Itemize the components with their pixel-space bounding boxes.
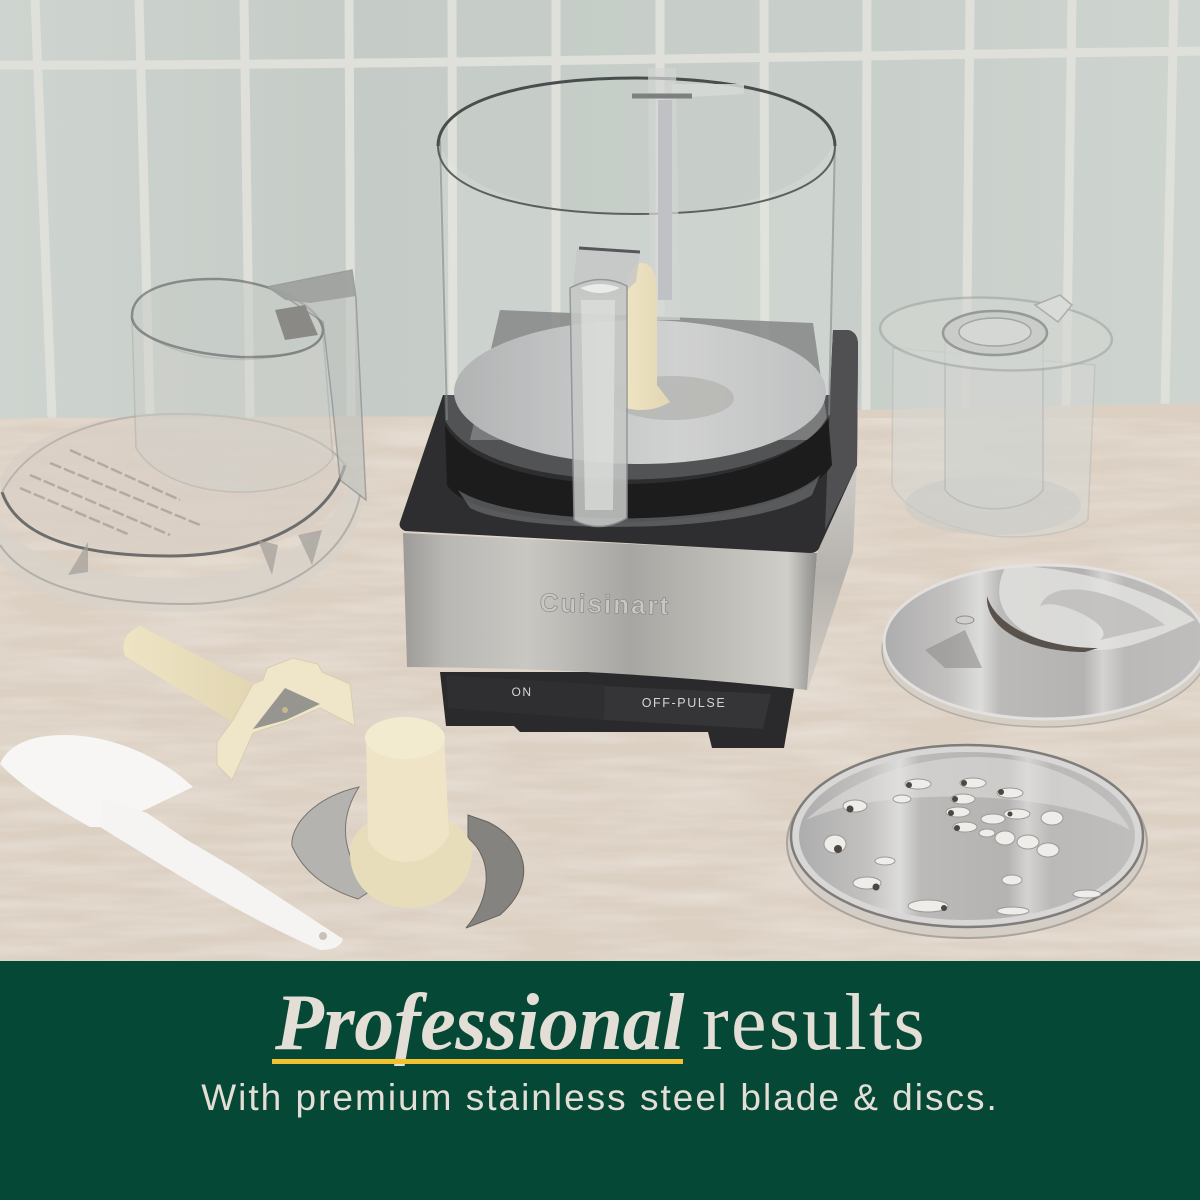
central column	[632, 68, 744, 320]
control buttons	[446, 675, 771, 729]
wall tiles	[0, 0, 1200, 420]
counter	[0, 403, 1200, 961]
work bowl	[438, 68, 835, 527]
dough blade	[123, 626, 355, 780]
small pusher	[878, 292, 1114, 537]
chopping blade	[292, 717, 524, 928]
spatula	[0, 735, 343, 950]
ivory drive shaft	[625, 263, 670, 410]
lid with feed tube	[0, 270, 366, 612]
control buttons: OFF-PULSE	[642, 696, 726, 710]
black ring under bowl	[445, 415, 832, 522]
banner	[0, 961, 1200, 1200]
brand name: Cuisinart	[539, 587, 671, 621]
shredding disc	[787, 745, 1147, 938]
slicing disc	[882, 565, 1200, 727]
subheading: With premium stainless steel blade & discs.	[201, 1077, 999, 1118]
dark motor plate	[470, 310, 830, 440]
headline underline	[272, 1059, 683, 1064]
feed chute	[570, 248, 640, 527]
control buttons: ON	[512, 685, 532, 699]
headline: results: results	[702, 979, 927, 1067]
headline: professional: Professional	[275, 979, 684, 1067]
base of food processor	[400, 310, 858, 748]
